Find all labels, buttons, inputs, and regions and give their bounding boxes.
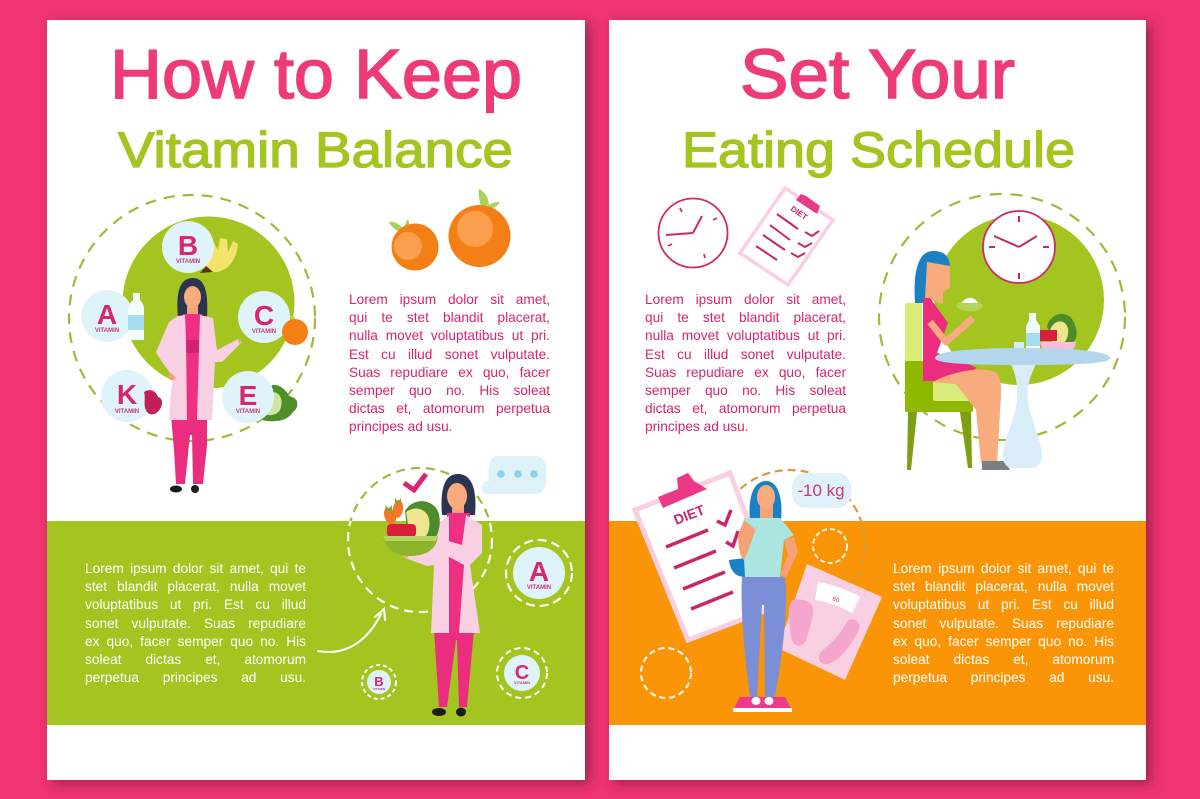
- vitamin A bubble with milk bottle: A: [97, 299, 117, 330]
- text block: schedule band: perpetua principes ad usu.: [893, 670, 1114, 685]
- vitamin A bubble with milk bottle: [81, 290, 144, 342]
- vitamin C badge: C: [515, 662, 529, 684]
- text block: schedule band: soleat dictas et, atomorum: [893, 652, 1114, 667]
- diet clipboard: DIET: [671, 501, 707, 528]
- vitamin E bubble with cabbage: E: [239, 380, 257, 411]
- seated woman: [915, 251, 1010, 470]
- illustration: vitamins circle with doctor: [69, 195, 315, 493]
- vitamin B bubble with banana: B: [178, 230, 198, 261]
- text block: schedule intro: Suas repudiare ex quo, facer: [645, 365, 846, 380]
- text block: vitamin intro: semper quo no. His soleat: [349, 383, 550, 398]
- heading: Vitamin Balance: Vitamin Balance: [118, 122, 513, 178]
- text block: vitamin intro: Suas repudiare ex quo, facer: [349, 365, 550, 380]
- title: Set Your: Set Your: [740, 35, 1015, 113]
- vitamin K bubble with meat: K: [117, 379, 137, 410]
- table with food: [935, 313, 1110, 468]
- vitamin A badge: VITAMIN: [527, 585, 551, 591]
- icon: diet checklist: [740, 188, 833, 285]
- vegetables in bowl: [382, 498, 440, 556]
- vitamin C bubble with orange: C: [254, 300, 274, 331]
- text block: vitamin band: sonet vulputate. Suas repudiare: [85, 616, 306, 631]
- vitamin E bubble with cabbage: [222, 371, 297, 423]
- text block: vitamin intro: Est cu illud sonet vulputate.: [349, 347, 550, 362]
- text block: vitamin intro: qui te stet blandit placerat,: [349, 310, 550, 325]
- vitamin B bubble with banana: [162, 221, 238, 273]
- text block: schedule band: Lorem ipsum dolor sit amet, qui te: [893, 561, 1114, 576]
- icon: wall clock: [658, 198, 728, 268]
- illustration: doctor with vegetable bowl: [318, 456, 572, 716]
- text block: schedule intro: nulla movet voluptatibus ut pri.: [645, 328, 846, 343]
- text block: schedule band: [893, 561, 1114, 685]
- vitamin C badge: VITAMIN: [514, 680, 530, 685]
- text block: vitamin band: stet blandit placerat, nulla movet: [85, 579, 306, 594]
- doctor figure: [401, 474, 482, 716]
- icon: wall clock: [983, 211, 1055, 283]
- diet clipboard: [635, 473, 780, 640]
- text block: schedule intro: Est cu illud sonet vulputate.: [645, 347, 846, 362]
- woman figure: [729, 481, 798, 712]
- bathroom scale: 60: [831, 596, 840, 605]
- vitamin C bubble with orange: VITAMIN: [252, 329, 276, 335]
- vitamin E bubble with cabbage: VITAMIN: [236, 409, 260, 415]
- text block: vitamin intro: Lorem ipsum dolor sit amet,: [349, 292, 550, 307]
- vitamin A badge: [506, 540, 572, 606]
- text block: schedule band: ex quo, facer semper quo no. His: [893, 634, 1114, 649]
- weight loss bubble: [792, 473, 851, 508]
- text block: vitamin band: Lorem ipsum dolor sit amet, qui te: [85, 561, 306, 576]
- vitamin K bubble with meat: VITAMIN: [115, 409, 139, 415]
- icon: diet checklist: DIET: [789, 204, 809, 222]
- doctor figure: [156, 278, 242, 493]
- vitamin B badge: [362, 665, 396, 699]
- illustration: woman on scale with diet list: [635, 470, 882, 712]
- text block: schedule intro: qui te stet blandit placerat,: [645, 310, 846, 325]
- text block: schedule band: voluptatibus ut pri. Est cu illud: [893, 597, 1114, 612]
- text block: vitamin intro: [349, 292, 550, 434]
- heading: Eating Schedule: Eating Schedule: [682, 122, 1075, 178]
- text block: schedule intro: [645, 292, 846, 434]
- weight loss bubble: -10 kg: [797, 481, 845, 500]
- vitamin A bubble with milk bottle: VITAMIN: [95, 328, 119, 334]
- arrow: [318, 609, 385, 652]
- vitamin C badge: [497, 648, 547, 698]
- text block: schedule intro: Lorem ipsum dolor sit amet,: [645, 292, 846, 307]
- icon: speech bubble: [482, 456, 546, 494]
- text block: schedule band: stet blandit placerat, nulla movet: [893, 579, 1114, 594]
- icon: check mark: [404, 474, 426, 490]
- illustration: woman eating at table: [879, 194, 1125, 470]
- chair: [905, 303, 976, 470]
- title: How to Keep: How to Keep: [110, 35, 522, 113]
- text block: vitamin band: voluptatibus ut pri. Est cu illud: [85, 597, 306, 612]
- panel: eating schedule: [609, 20, 1151, 784]
- text block: vitamin band: [85, 561, 306, 685]
- text block: vitamin band: soleat dictas et, atomorum: [85, 652, 306, 667]
- text block: vitamin band: ex quo, facer semper quo no. His: [85, 634, 306, 649]
- vitamin B badge: B: [374, 674, 384, 689]
- vitamin A badge: A: [529, 556, 549, 587]
- vitamin B bubble with banana: VITAMIN: [176, 259, 200, 265]
- text block: vitamin intro: nulla movet voluptatibus ut pri.: [349, 328, 550, 343]
- panel: vitamin balance: [47, 20, 590, 784]
- text block: schedule band: sonet vulputate. Suas repudiare: [893, 616, 1114, 631]
- text block: vitamin band: perpetua principes ad usu.: [85, 670, 306, 685]
- text block: vitamin intro: dictas et, atomorum perpetua: [349, 401, 550, 416]
- vitamin C bubble with orange: [238, 291, 308, 345]
- vitamin B badge: VITAMIN: [373, 687, 385, 691]
- text block: vitamin intro: principes ad usu.: [349, 419, 452, 434]
- bathroom scale: [778, 564, 882, 680]
- text block: schedule intro: dictas et, atomorum perpetua: [645, 401, 846, 416]
- text block: schedule intro: principes ad usu.: [645, 419, 748, 434]
- vitamin K bubble with meat: [101, 370, 162, 422]
- text block: schedule intro: semper quo no. His soleat: [645, 383, 846, 398]
- illustration: oranges: [389, 189, 510, 270]
